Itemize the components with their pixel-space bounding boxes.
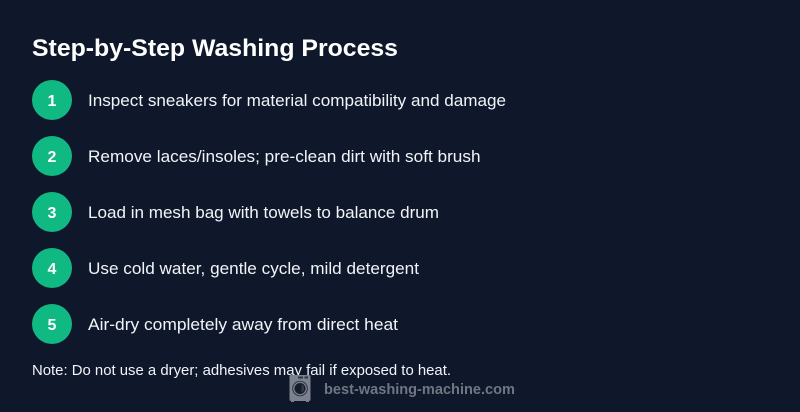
step 3: Load in mesh bag with towels to balance drum	[88, 203, 439, 222]
icon: washing machine	[290, 375, 310, 402]
step 5	[32, 304, 398, 344]
watermark: best-washing-machine.com	[324, 382, 515, 398]
step 4: 4	[48, 261, 57, 278]
title: Step-by-Step Washing Process	[32, 35, 398, 62]
step 1	[32, 80, 506, 120]
step 3: 3	[48, 205, 57, 222]
step 2: 2	[48, 149, 57, 166]
step 5: 5	[48, 317, 57, 334]
step 4: Use cold water, gentle cycle, mild detergent	[88, 259, 419, 278]
step 3	[32, 192, 439, 232]
note: Note: Do not use a dryer; adhesives may fail if exposed to heat.	[32, 363, 451, 379]
step 5: Air-dry completely away from direct heat	[88, 315, 398, 334]
step 2: Remove laces/insoles; pre-clean dirt with soft brush	[88, 147, 480, 166]
step 1: Inspect sneakers for material compatibility and damage	[88, 91, 506, 110]
step 1: 1	[48, 93, 57, 110]
step 4	[32, 248, 419, 288]
step 2	[32, 136, 480, 176]
